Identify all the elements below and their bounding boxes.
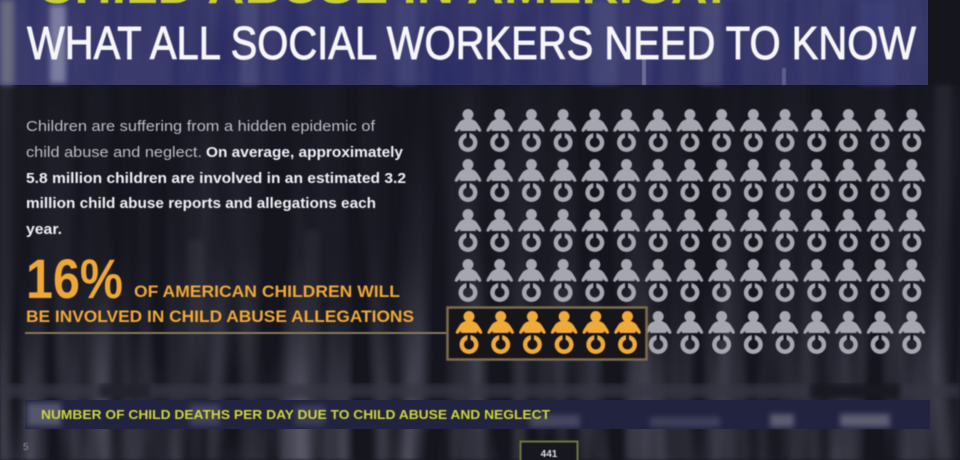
header band <box>0 0 928 85</box>
connector line from callout to highlighted icons <box>25 332 447 334</box>
highlight box with orange babies <box>448 308 646 360</box>
chart: axis tick label: 5 <box>23 442 29 453</box>
section heading band: NUMBER OF CHILD DEATHS PER DAY DUE TO CHILD ABUSE AND NEGLECT <box>41 408 550 422</box>
intro paragraph: On average, approximately <box>206 145 403 161</box>
chart: bar value box: 441 <box>541 449 558 460</box>
lower texture strip <box>0 384 960 398</box>
icon grid: gray babies <box>454 109 925 354</box>
intro paragraph: 5.8 million children are involved in an estimated 3.2 <box>26 171 406 187</box>
callout: 16 percent statistic <box>26 247 414 326</box>
callout: 16 percent statistic: BE INVOLVED IN CHILD ABUSE ALLEGATIONS <box>26 307 414 326</box>
callout: 16 percent statistic: OF AMERICAN CHILDREN WILL <box>134 282 400 301</box>
callout: 16 percent statistic: 16% <box>26 247 123 310</box>
section heading band <box>25 400 930 429</box>
intro paragraph: child abuse and neglect. <box>26 145 202 161</box>
intro paragraph: Children are suffering from a hidden epidemic of <box>26 119 376 135</box>
intro paragraph: year. <box>26 222 62 238</box>
intro paragraph <box>26 119 406 238</box>
intro paragraph: million child abuse reports and allegations each <box>26 196 376 212</box>
chart: bar value box <box>520 442 578 460</box>
